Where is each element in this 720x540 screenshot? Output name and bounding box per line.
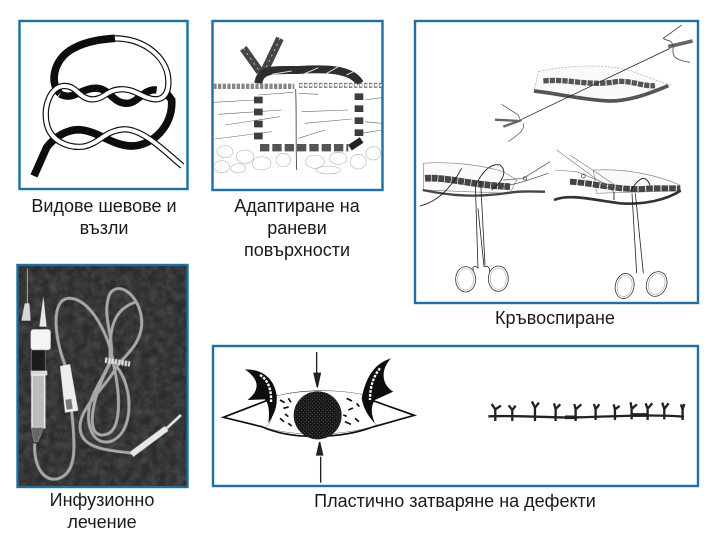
- caption: wound adaptation: повърхности: [244, 240, 350, 260]
- caption: hemostasis: Кръвоспиране: [495, 308, 615, 328]
- arrow: bottom: [317, 442, 323, 483]
- caption: infusion therapy: Инфузионно: [50, 490, 154, 510]
- caption: infusion therapy: [50, 490, 154, 532]
- panel: hemostasis: [415, 21, 698, 303]
- icon: left wound with clamp: [420, 162, 550, 292]
- caption: infusion therapy: лечение: [67, 512, 137, 532]
- icon: sutured line: [488, 401, 684, 421]
- icon: defect diagram: [223, 352, 414, 483]
- icon: knot: [34, 38, 182, 176]
- panel: suture knot: [20, 21, 188, 189]
- caption: plastic closure: Пластично затваряне на дефекти: [314, 491, 596, 511]
- panel: plastic closure of defects: [213, 346, 698, 486]
- panel: infusion set photo: [18, 265, 188, 487]
- caption: wound adaptation: [234, 196, 360, 260]
- icon: skin cross-section with suture: [213, 38, 382, 174]
- caption: suture types: Видове шевове и: [31, 196, 177, 216]
- caption: wound adaptation: Адаптиране на: [234, 196, 360, 216]
- icon: wound with thread: [495, 25, 693, 142]
- icon: right wound with clamp: [554, 150, 681, 300]
- caption: suture types: [31, 196, 177, 238]
- icon: infusion set: [21, 268, 181, 479]
- caption: wound adaptation: раневи: [267, 218, 327, 238]
- arrow: top: [314, 352, 320, 387]
- panel: wound edge adaptation: [212, 21, 382, 190]
- caption: suture types: възли: [80, 218, 128, 238]
